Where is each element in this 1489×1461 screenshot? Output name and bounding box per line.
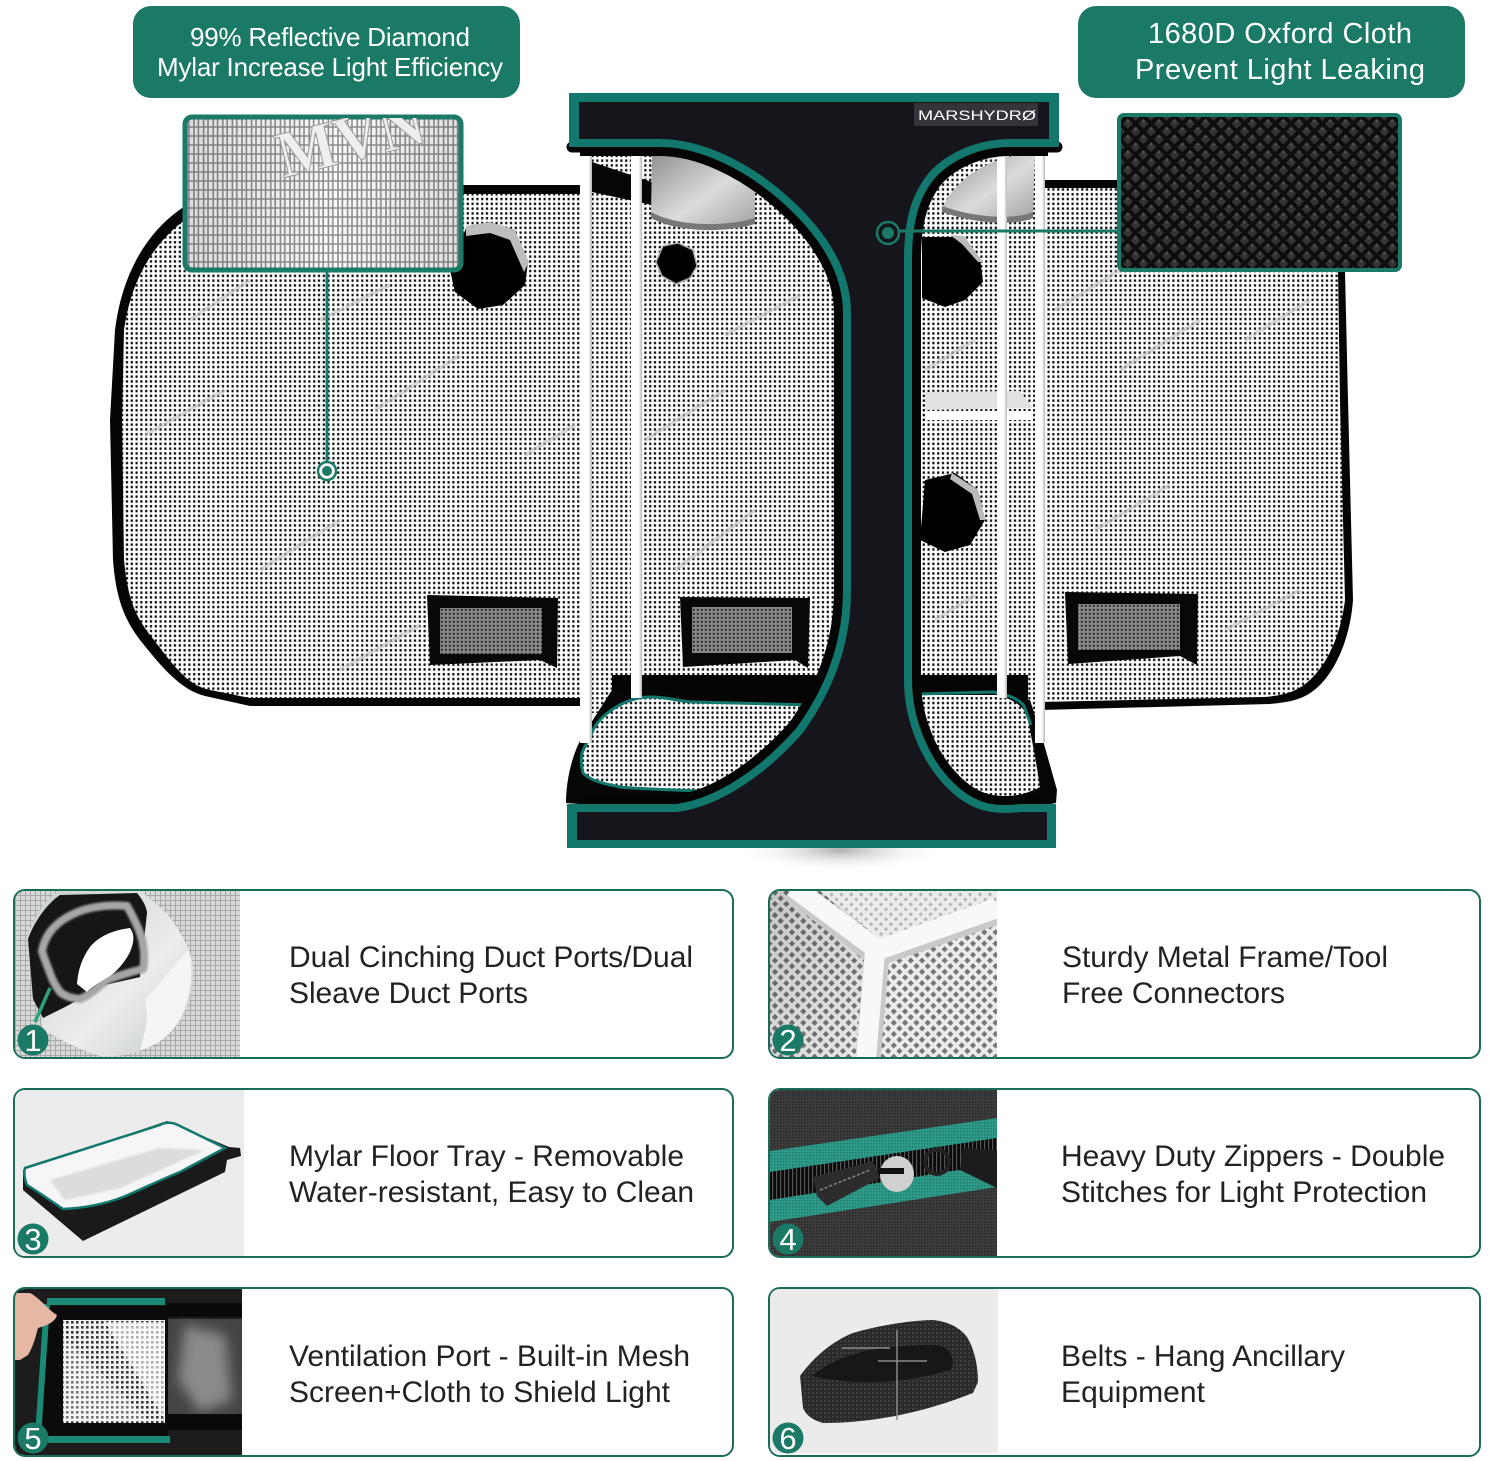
badge 4 [772, 1222, 804, 1257]
badge 1 [18, 1023, 48, 1058]
heading pill: diamond mylar: Mylar Increase Light Efficiency [157, 52, 503, 82]
caption: Belts - Hang Ancillary [1061, 1340, 1345, 1373]
caption [289, 941, 693, 1010]
black lip under top frame [572, 142, 1057, 152]
badge 5: 5 [24, 1421, 42, 1456]
caption: Ventilation Port - Built-in Mesh [289, 1340, 690, 1373]
black door edging [580, 143, 1048, 809]
caption [1061, 1340, 1345, 1409]
photo: duct sleeve [15, 891, 240, 1057]
panel: right back wall of tent [1040, 180, 1353, 710]
caption: Mylar Floor Tray - Removable [289, 1140, 684, 1173]
panel: belts [769, 1288, 1480, 1456]
panel: floor tray [14, 1089, 733, 1257]
panel: duct ports [14, 890, 733, 1058]
badge 3: 3 [24, 1222, 42, 1257]
leader line and target [877, 222, 1118, 244]
caption: Sleave Duct Ports [289, 977, 528, 1010]
heading pill: oxford cloth: 1680D Oxford Cloth [1148, 18, 1412, 50]
icon: net pocket on left wall [427, 595, 558, 668]
floor tray right [918, 695, 1040, 797]
icon: silver duct sleeve right [942, 153, 1035, 223]
right door opening [908, 153, 1057, 814]
icon: silver duct sleeve left [651, 153, 755, 230]
photo: belts [770, 1289, 998, 1453]
leader line and target [318, 272, 336, 480]
photo: ventilation port [15, 1289, 242, 1455]
caption: Stitches for Light Protection [1061, 1176, 1427, 1209]
heading pill: oxford cloth [1078, 6, 1465, 98]
brand logo plate [914, 103, 1038, 126]
badge 6: 6 [779, 1421, 797, 1456]
caption: Dual Cinching Duct Ports/Dual [289, 941, 693, 974]
poles left [580, 153, 642, 743]
caption: Heavy Duty Zippers - Double [1061, 1140, 1445, 1173]
caption: Equipment [1061, 1376, 1206, 1409]
caption: Sturdy Metal Frame/Tool [1062, 941, 1388, 974]
green frame trim [567, 93, 1059, 848]
icon: net pocket on right wall [1065, 592, 1198, 665]
shelf [925, 391, 1033, 420]
badge 2: 2 [779, 1023, 797, 1058]
heading pill: diamond mylar [133, 6, 520, 98]
panel: zippers [769, 1089, 1480, 1257]
left door opening [566, 150, 843, 812]
photo: zipper [770, 1090, 997, 1256]
icon: small duct port [656, 243, 697, 284]
badge 2 [772, 1023, 804, 1058]
callout: reflective mylar swatch [185, 85, 461, 480]
caption [289, 1140, 694, 1209]
photo: floor tray [15, 1090, 244, 1256]
green door trim [567, 143, 1059, 809]
panel: left back wall of tent [110, 185, 590, 706]
poles right [997, 153, 1045, 743]
tent: front view with open doors [566, 93, 1059, 848]
caption: Water-resistant, Easy to Clean [289, 1176, 694, 1209]
panel: metal frame [769, 887, 1480, 1060]
panel: ventilation port [14, 1288, 733, 1456]
embossed logo: MVN [269, 85, 432, 193]
heading pill: diamond mylar: 99% Reflective Diamond [190, 22, 470, 52]
badge 3 [18, 1222, 48, 1257]
heading pill: oxford cloth: Prevent Light Leaking [1135, 54, 1425, 86]
icon: duct port right lower [920, 473, 985, 552]
tent body fabric [567, 93, 1059, 848]
brand logo plate: MARSHYDRØ [918, 107, 1036, 123]
badge 6 [772, 1421, 804, 1456]
caption [289, 1340, 690, 1409]
tent shadow [735, 828, 945, 872]
icon: duct port hole on left wall [450, 222, 529, 309]
floor tray left [581, 697, 812, 792]
caption: Screen+Cloth to Shield Light [289, 1376, 671, 1409]
callout: oxford cloth swatch [877, 115, 1400, 270]
icon: duct port right upper [922, 235, 983, 307]
badge 5 [18, 1421, 48, 1456]
caption [1062, 941, 1388, 1010]
photo: frame connector [770, 887, 997, 1060]
badge 1: 1 [24, 1023, 42, 1058]
caption: Free Connectors [1062, 977, 1285, 1010]
badge 4: 4 [779, 1222, 797, 1257]
caption [1061, 1140, 1445, 1209]
icon: net pocket left door [680, 597, 810, 668]
